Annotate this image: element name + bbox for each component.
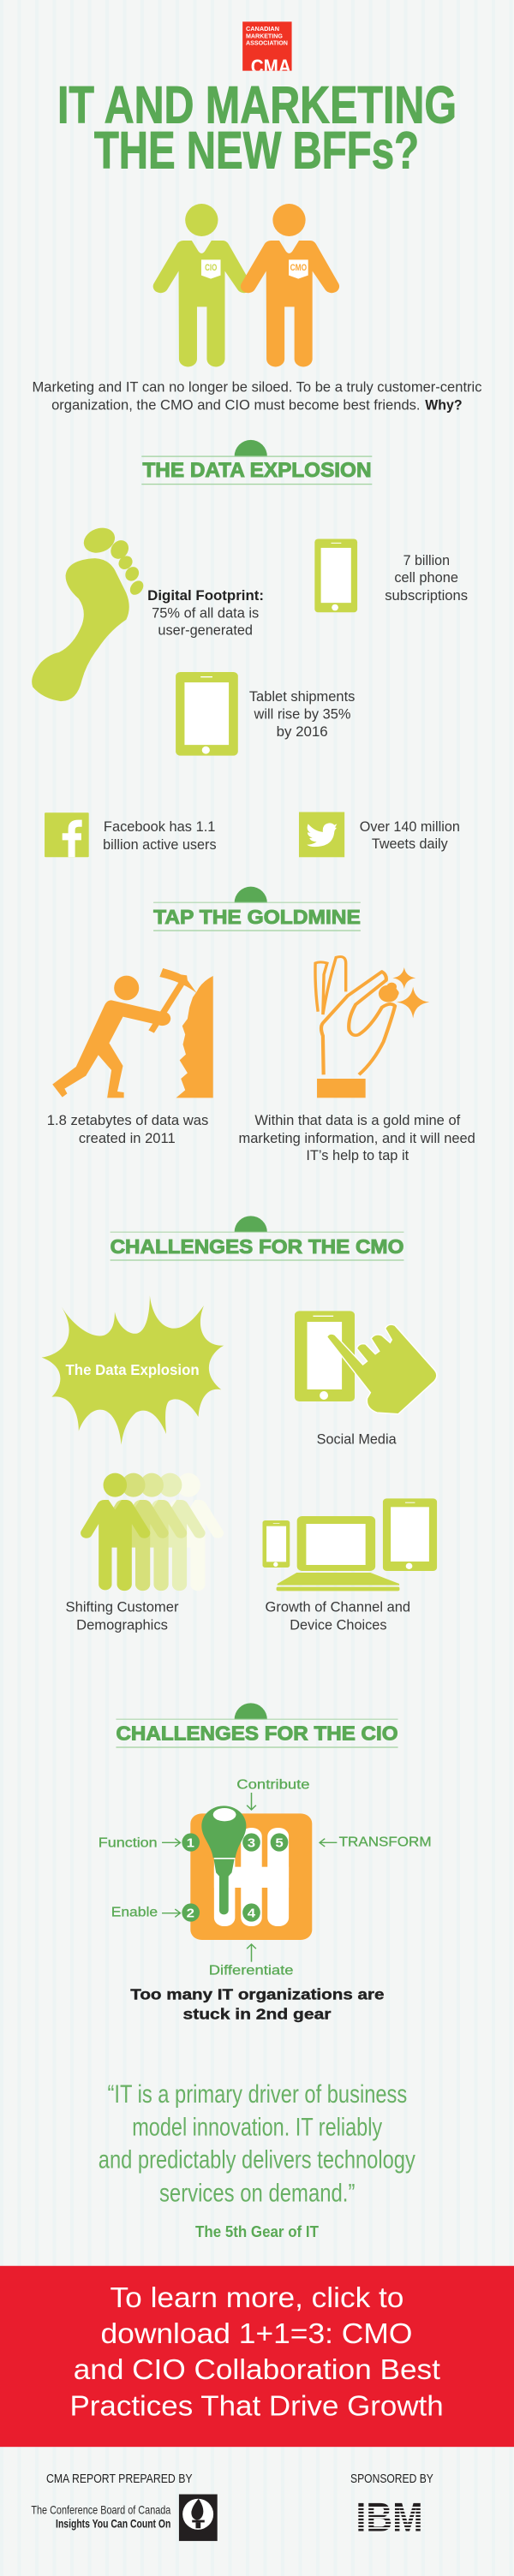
icon: shifting group of people bbox=[81, 1473, 224, 1591]
heading: challenges for the cio: CHALLENGES FOR THE CIO bbox=[116, 1722, 398, 1745]
text: channel and device choices bbox=[266, 1599, 410, 1633]
diagram: gear shift: 2 bbox=[187, 1907, 194, 1920]
label: contribute with arrow bbox=[236, 1776, 310, 1810]
text: digital footprint: 75% of all data is bbox=[152, 604, 259, 621]
icon: devices bbox=[263, 1498, 437, 1591]
logo: CMA bbox=[242, 21, 292, 71]
icon: explosion burst bbox=[42, 1295, 224, 1445]
footer: report prepared by: The Conference Board of Canada bbox=[31, 2503, 171, 2516]
call to action banner: and CIO Collaboration Best bbox=[74, 2353, 440, 2385]
footer: report prepared by: Insights You Can Count On bbox=[56, 2517, 170, 2531]
label: enable with arrow: Enable bbox=[111, 1904, 158, 1919]
logo: CMA: ASSOCIATION bbox=[246, 39, 288, 47]
logo: IBM: IBM bbox=[356, 2494, 423, 2540]
intro paragraph bbox=[32, 378, 482, 413]
quote source: The 5th Gear of IT bbox=[195, 2223, 319, 2240]
footer: sponsored by bbox=[350, 2472, 433, 2540]
text: cell phone subscriptions bbox=[385, 552, 468, 604]
text: facebook users: billion active users bbox=[103, 836, 217, 853]
text: tweets daily: Tweets daily bbox=[372, 836, 448, 852]
footer: report prepared by: CMA REPORT PREPARED BY bbox=[46, 2472, 193, 2485]
rock face bbox=[176, 976, 213, 1098]
text: shifting customer demographics: Demographics bbox=[76, 1617, 168, 1633]
text: tablet shipments: by 2016 bbox=[277, 723, 328, 740]
text: channel and device choices: Growth of Channel and bbox=[266, 1599, 410, 1615]
panel: header bbox=[32, 21, 482, 413]
diagram: gear shift bbox=[182, 1806, 312, 1940]
panel: challenges for the cio bbox=[99, 1703, 432, 2023]
logo: CMA: CANADIAN bbox=[246, 25, 279, 33]
call to action banner: download 1+1=3: CMO bbox=[100, 2317, 412, 2349]
footer: report prepared by bbox=[31, 2472, 218, 2541]
label: contribute with arrow: Contribute bbox=[236, 1776, 310, 1792]
footer: sponsored by: SPONSORED BY bbox=[350, 2472, 433, 2485]
intro paragraph: organization, the CMO and CIO must become best friends. bbox=[51, 396, 421, 413]
icon: footprint bbox=[32, 523, 146, 701]
text: social media: Social Media bbox=[317, 1431, 397, 1447]
text: digital footprint: Digital Footprint: bbox=[147, 587, 264, 604]
panel: the data explosion bbox=[32, 440, 468, 857]
intro paragraph: Why? bbox=[425, 396, 463, 413]
text: shifting customer demographics bbox=[66, 1599, 179, 1633]
text: gold mine of marketing information: Within that data is a gold mine of bbox=[254, 1112, 461, 1128]
icon: facebook bbox=[45, 812, 89, 857]
icon: miner with pickaxe bbox=[52, 968, 213, 1098]
icon: phone bbox=[314, 538, 357, 612]
icon: tablet bbox=[176, 672, 238, 756]
icon: twitter bbox=[299, 812, 344, 857]
title bbox=[57, 75, 457, 180]
text: digital footprint bbox=[147, 587, 264, 638]
diagram: gear shift: 5 bbox=[275, 1836, 284, 1850]
text: zetabytes bbox=[47, 1112, 208, 1146]
label: differentiate with arrow: Differentiate bbox=[209, 1962, 293, 1978]
panel: tap the goldmine bbox=[47, 887, 475, 1261]
text: gold mine of marketing information: IT’s help to tap it bbox=[306, 1147, 409, 1163]
call to action banner: Practices That Drive Growth bbox=[70, 2389, 444, 2421]
quote: services on demand.” bbox=[159, 2180, 355, 2208]
text: tweets daily bbox=[360, 818, 460, 852]
heading: challenges for the cmo: CHALLENGES FOR THE CMO bbox=[111, 1236, 403, 1258]
label: transform with arrow: TRANSFORM bbox=[339, 1834, 432, 1849]
icon: CMO figure bbox=[241, 204, 339, 366]
quote bbox=[99, 2081, 415, 2208]
text: cell phone subscriptions: 7 billion bbox=[403, 552, 450, 568]
label: differentiate with arrow bbox=[209, 1944, 293, 1978]
quote: model innovation. IT reliably bbox=[132, 2114, 383, 2141]
text: gold mine of marketing information: marketing information, and it will need bbox=[239, 1130, 475, 1146]
heading: tap the goldmine bbox=[153, 887, 361, 931]
logo: conference board torch bbox=[179, 2495, 218, 2541]
text: stuck in 2nd gear bbox=[130, 1986, 385, 2023]
logo: CMA: MARKETING bbox=[246, 33, 283, 39]
heading: tap the goldmine: TAP THE GOLDMINE bbox=[153, 907, 361, 929]
icon: hand holding gold bbox=[315, 956, 429, 1098]
heading: challenges for the cio bbox=[116, 1703, 398, 1748]
text: digital footprint: user-generated bbox=[158, 622, 253, 638]
text: tablet shipments: will rise by 35% bbox=[254, 706, 350, 722]
icon: CMO figure: CMO bbox=[290, 264, 307, 273]
text: tweets daily: Over 140 million bbox=[360, 818, 460, 835]
text: stuck in 2nd gear: stuck in 2nd gear bbox=[183, 2006, 332, 2023]
heading: the data explosion bbox=[141, 440, 372, 485]
heading: the data explosion: THE DATA EXPLOSION bbox=[142, 459, 372, 481]
panel: challenges for the cmo bbox=[42, 1295, 437, 1633]
text: tablet shipments: Tablet shipments bbox=[249, 688, 355, 705]
icon: CIO figure: CIO bbox=[205, 264, 217, 273]
text: gold mine of marketing information bbox=[239, 1112, 475, 1163]
diagram: gear shift: 1 bbox=[187, 1836, 194, 1850]
call to action banner bbox=[0, 2266, 514, 2447]
text: cell phone subscriptions: subscriptions bbox=[385, 587, 468, 604]
text: facebook users bbox=[103, 818, 217, 853]
quote: “IT is a primary driver of business bbox=[108, 2081, 407, 2109]
logo: CMA: CMA bbox=[251, 56, 291, 78]
diagram: gear shift: 3 bbox=[248, 1836, 255, 1850]
text: facebook users: Facebook has 1.1 bbox=[104, 818, 215, 835]
text: zetabytes: 1.8 zetabytes of data was bbox=[47, 1112, 208, 1128]
text: shifting customer demographics: Shifting Customer bbox=[66, 1599, 179, 1615]
diagram: gear shift: 4 bbox=[248, 1907, 255, 1920]
panel: quote and footer bbox=[0, 2081, 514, 2541]
label: function with arrow: Function bbox=[99, 1835, 158, 1850]
text: stuck in 2nd gear: Too many IT organizations are bbox=[130, 1986, 385, 2003]
icon: CIO figure bbox=[153, 204, 252, 366]
text: channel and device choices: Device Choices bbox=[290, 1617, 387, 1633]
text: cell phone subscriptions: cell phone bbox=[394, 569, 458, 586]
text: zetabytes: created in 2011 bbox=[79, 1130, 176, 1146]
icon: social media phone and hand bbox=[295, 1311, 437, 1414]
text: tablet shipments bbox=[249, 688, 355, 740]
quote: and predictably delivers technology bbox=[99, 2146, 415, 2174]
icon: explosion burst: The Data Explosion bbox=[66, 1361, 200, 1378]
heading: challenges for the cmo bbox=[111, 1216, 403, 1261]
call to action banner: To learn more, click to bbox=[111, 2281, 403, 2313]
